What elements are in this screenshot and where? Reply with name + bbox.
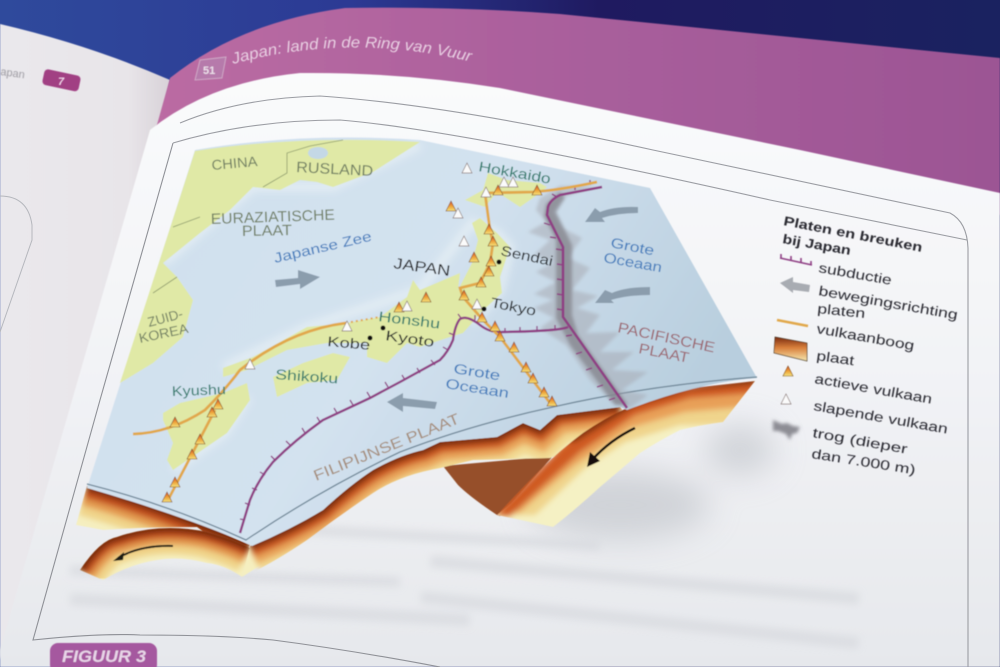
- legend: actieve vulkaan: [783, 366, 933, 407]
- arrow: lower left slab: [113, 546, 173, 561]
- coastal halo: [163, 145, 510, 470]
- arrow: right slab: [587, 428, 635, 467]
- panel: left book page: apan: [0, 66, 25, 81]
- label: Filipijnse plaat: FILIPIJNSE PLAAT: [311, 411, 462, 485]
- label: Pacifische plaat: PLAAT: [637, 341, 691, 367]
- label: Grote Oceaan east: [602, 234, 663, 275]
- label: Shikoku: Shikoku: [275, 366, 339, 386]
- land: Kyushu: [163, 383, 250, 470]
- label: China: CHINA: [211, 153, 259, 173]
- label: Pacifische plaat: PACIFISCHE: [616, 320, 717, 357]
- label: Zuid-Korea: ZUID-: [146, 306, 185, 330]
- plate slab: lower left with arrow: [80, 528, 250, 580]
- sea surface: [87, 138, 757, 546]
- plate cross-section: brown wedge: [443, 456, 553, 516]
- legend: trog: [773, 420, 917, 477]
- legend: vulkaanboog: [777, 320, 916, 353]
- header chapter badge: 51: [203, 65, 215, 77]
- land: Honshu: [223, 218, 510, 377]
- legend: bewegingsrichting platen: [780, 277, 959, 322]
- label: Rusland: RUSLAND: [296, 159, 374, 180]
- legend: plaat: plaat: [816, 348, 856, 368]
- legend: [773, 213, 959, 477]
- label: Honshu: Honshu: [378, 308, 441, 332]
- label: Grote Oceaan south: [445, 360, 510, 401]
- map labels: [138, 153, 374, 346]
- trench grey deep zones: [528, 186, 648, 408]
- subduction: Pacific trench: [544, 180, 627, 408]
- label: Kyoto: Kyoto: [385, 327, 436, 350]
- front sea edge line: [87, 377, 757, 540]
- left page number badge: 7: [58, 76, 65, 88]
- label: Grote Oceaan south: Oceaan: [445, 375, 510, 401]
- legend: vulkaanboog: vulkaanboog: [815, 321, 916, 353]
- land: Shikoku: [273, 353, 350, 397]
- label: Sendai: Sendai: [499, 242, 555, 269]
- figure badge: [50, 643, 157, 667]
- panel: purple chapter header band: [156, 7, 1000, 215]
- header title: Japan: land in de Ring van Vuur: [232, 36, 474, 64]
- chart: map of Japan and plates: [76, 138, 760, 580]
- label: Pacifische plaat: [616, 320, 717, 367]
- legend title: [781, 213, 924, 258]
- land: Asian mainland: [120, 140, 420, 383]
- label: Tokyo: Tokyo: [489, 294, 538, 319]
- legend: slapende vulkaan: [781, 394, 949, 437]
- label: Grote Oceaan east: Grote: [609, 234, 656, 258]
- arrow: Pacific plate motion south: [595, 287, 650, 303]
- panel: left book page: [0, 24, 170, 660]
- legend: bewegingsrichting platen: platen: [817, 301, 866, 321]
- arrow: Japanse Zee plate motion: [275, 270, 320, 289]
- arrow: Philippine plate motion: [387, 393, 437, 412]
- label: Euraziatische plaat: EURAZIATISCHE: [211, 207, 335, 228]
- legend title: Platen en breuken: [782, 213, 924, 255]
- left page number badge: [42, 69, 81, 92]
- legend: plaat: [774, 337, 856, 368]
- subduction: Philippine plate boundary: [240, 314, 568, 533]
- label: Euraziatische plaat: [211, 207, 335, 240]
- label: Zuid-Korea: KOREA: [138, 321, 190, 346]
- label: Zuid-Korea: [138, 306, 190, 346]
- label: Grote Oceaan south: Grote: [453, 360, 502, 383]
- label: Japan: JAPAN: [392, 255, 451, 280]
- active volcanoes: [162, 185, 557, 502]
- lake: [308, 147, 328, 159]
- label: Japanse Zee: Japanse Zee: [272, 228, 373, 266]
- city dots: [368, 260, 502, 340]
- legend: actieve vulkaan: actieve vulkaan: [813, 371, 933, 407]
- label: Euraziatische plaat: PLAAT: [242, 222, 292, 240]
- label: Hokkaido: Hokkaido: [477, 158, 552, 187]
- header chapter badge: [195, 57, 226, 80]
- arrow: Pacific plate motion north: [585, 207, 638, 222]
- legend: slapende vulkaan: slapende vulkaan: [812, 398, 949, 437]
- label: Grote Oceaan east: Oceaan: [602, 249, 663, 275]
- dormant volcanoes: [245, 163, 518, 369]
- page show-through shadows: [70, 425, 859, 649]
- legend title: bij Japan: [781, 231, 852, 258]
- plate slab: centre: [242, 407, 640, 577]
- plate slab: left upper: [76, 486, 250, 548]
- label: Kyushu: Kyushu: [172, 381, 226, 399]
- land: Hokkaido: [465, 173, 547, 207]
- legend: subductie: subductie: [817, 260, 893, 288]
- legend: trog: dan 7.000 m): [811, 446, 917, 477]
- legend: bewegingsrichting platen: bewegingsrichting: [817, 283, 959, 322]
- legend: subductie: [780, 254, 893, 288]
- legend: trog: trog (dieper: [811, 425, 909, 457]
- figure badge: FIGUUR 3: [62, 647, 147, 666]
- country borders: [153, 140, 343, 293]
- volcanic arcs: [133, 182, 597, 500]
- plate slab: right subducting: [495, 375, 760, 527]
- label: Kobe: Kobe: [327, 333, 371, 353]
